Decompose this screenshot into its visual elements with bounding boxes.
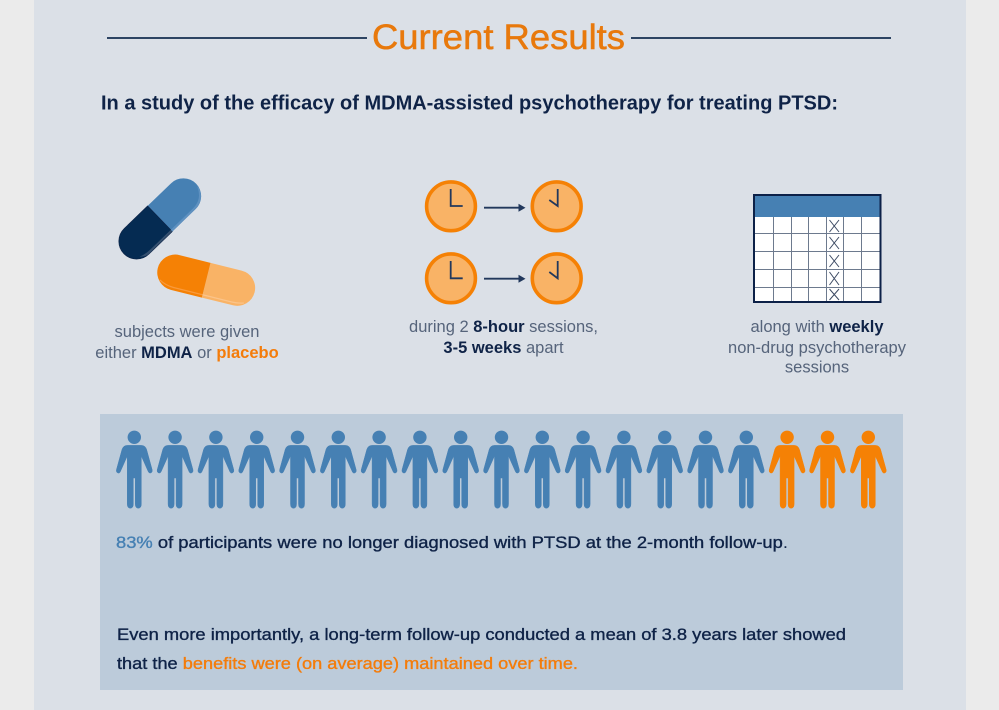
caption: calendar: non-drug psychotherapy xyxy=(728,339,907,357)
caption: clocks xyxy=(409,318,598,357)
title with rules: Current Results xyxy=(372,18,625,57)
text: long-term follow-up xyxy=(117,626,846,673)
text: long-term follow-up: Even more importantly, a long-term follow-up conducted a mean of 3.8 years later showed xyxy=(117,626,846,644)
heading: In a study of the efficacy of MDMA-assisted psychotherapy for treating PTSD: xyxy=(101,92,838,114)
panel: results xyxy=(100,414,903,690)
pictogram: participants xyxy=(116,431,886,508)
caption: capsules xyxy=(95,323,279,362)
icon: clocks and arrows xyxy=(427,182,581,303)
caption: clocks: during 2 8-hour sessions, xyxy=(409,318,598,336)
text: long-term follow-up: that the benefits were (on average) maintained over time. xyxy=(117,655,578,673)
text: 83% result: 83% of participants were no longer diagnosed with PTSD at the 2-month follow-up . xyxy=(116,534,788,552)
caption: capsules: subjects were given xyxy=(115,323,259,341)
caption: calendar xyxy=(728,318,907,376)
caption: clocks: 3-5 weeks apart xyxy=(443,339,564,357)
icon: calendar xyxy=(754,195,880,302)
caption: calendar: along with weekly xyxy=(750,318,884,336)
caption: capsules: either MDMA or placebo xyxy=(95,344,279,362)
caption: calendar: sessions xyxy=(785,358,849,376)
icon: capsules xyxy=(111,171,259,310)
